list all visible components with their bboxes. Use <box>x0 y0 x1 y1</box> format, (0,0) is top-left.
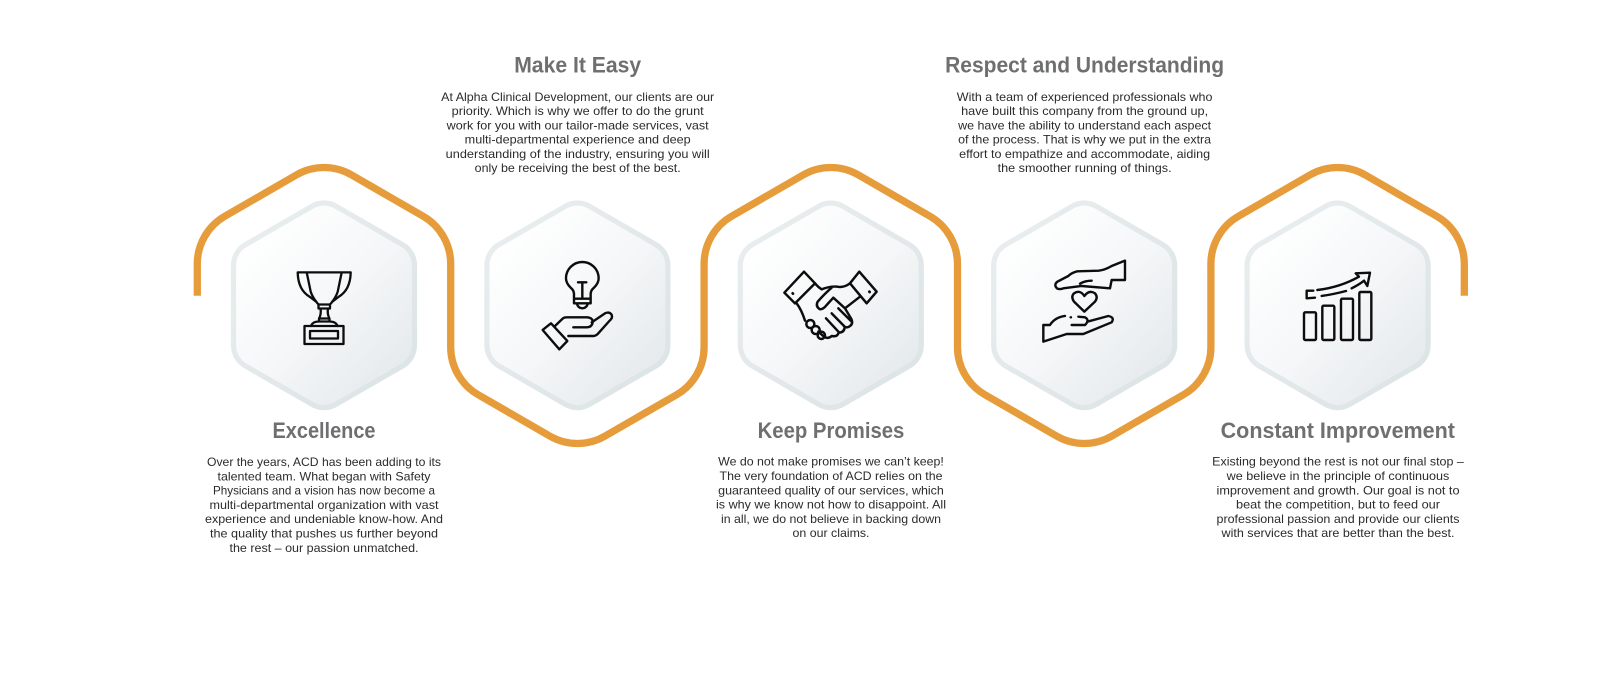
text: Constant Improvement body: improvement and growth. Our goal is not to <box>1216 483 1460 497</box>
icon: hands protecting a heart <box>1043 261 1125 342</box>
text: Respect and Understanding body: With a team of experienced professionals who <box>957 90 1213 104</box>
text: Respect and Understanding body: of the process. That is why we put in the extra <box>958 133 1211 147</box>
text: Constant Improvement body: with services that are better than the best. <box>1220 526 1454 540</box>
heading: Keep Promises: Keep Promises <box>758 418 904 443</box>
panel: Respect and Understanding <box>945 53 1224 408</box>
text: Excellence body: experience and undeniable know-how. And <box>205 512 443 526</box>
icon: light bulb over hand <box>543 262 612 349</box>
text: Constant Improvement body <box>1212 455 1464 540</box>
text: Make It Easy body: only be receiving the best of the best. <box>475 161 681 175</box>
icon: growth bar chart with arrow <box>1304 273 1371 340</box>
text: Excellence body <box>205 455 443 555</box>
hexagon: Keep Promises <box>740 203 921 408</box>
text: Excellence body: Physicians and a vision has now become a <box>213 484 435 498</box>
text: Respect and Understanding body <box>957 90 1213 175</box>
text: Keep Promises body: guaranteed quality of our services, which <box>718 483 944 497</box>
text: Respect and Understanding body: effort to empathize and accommodate, aiding <box>959 147 1210 161</box>
text: Respect and Understanding body: have built this company from the ground up, <box>961 104 1208 118</box>
heading: Make It Easy: Make It Easy <box>514 53 642 78</box>
text: Keep Promises body: We do not make promises we can’t keep! <box>718 455 944 469</box>
text: Respect and Understanding body: the smoother running of things. <box>998 161 1172 175</box>
panel: Keep Promises <box>716 203 946 540</box>
text: Make It Easy body <box>441 90 714 175</box>
text: Excellence body: talented team. What began with Safety <box>218 469 430 483</box>
text: Keep Promises body: on our claims. <box>792 526 870 540</box>
panel: Make It Easy <box>441 53 714 408</box>
text: Make It Easy body: understanding of the industry, ensuring you will <box>446 147 710 161</box>
text: Excellence body: the quality that pushes us further beyond <box>210 526 438 540</box>
text: Make It Easy body: work for you with our tailor-made services, vast <box>446 118 709 132</box>
text: Respect and Understanding body: we have the ability to understand each aspect <box>957 118 1212 132</box>
text: Excellence body: the rest – our passion unmatched. <box>230 541 418 555</box>
heading: Constant Improvement: Constant Improvement <box>1221 418 1456 443</box>
hexagon: Constant Improvement <box>1247 203 1428 408</box>
heading: Respect and Understanding: Respect and Understanding <box>945 53 1224 78</box>
icon: trophy <box>298 272 351 344</box>
text: Constant Improvement body: beat the competition, but to feed our <box>1236 498 1440 512</box>
panel: Constant Improvement <box>1212 203 1464 540</box>
hexagon: Respect and Understanding <box>994 203 1175 408</box>
text: Make It Easy body: multi-departmental experience and deep <box>465 133 691 147</box>
heading: Excellence: Excellence <box>272 418 376 443</box>
panel: Excellence <box>205 203 443 555</box>
hexagon: Make It Easy <box>487 203 668 408</box>
text: Make It Easy body: At Alpha Clinical Development, our clients are our <box>441 90 714 104</box>
text: Excellence body: multi-departmental organization with vast <box>210 498 439 512</box>
icon: handshake <box>784 272 877 339</box>
orange ribbon connecting the hexagons <box>197 168 1464 443</box>
text: Constant Improvement body: we believe in the principle of continuous <box>1226 469 1449 483</box>
text: Constant Improvement body: professional passion and provide our clients <box>1216 512 1460 526</box>
text: Keep Promises body: in all, we do not believe in backing down <box>721 512 941 526</box>
text: Constant Improvement body: Existing beyond the rest is not our final stop – <box>1212 455 1464 469</box>
text: Make It Easy body: priority. Which is why we offer to do the grunt <box>452 104 704 118</box>
text: Keep Promises body <box>716 455 946 540</box>
hexagon: Excellence <box>234 203 414 408</box>
text: Keep Promises body: The very foundation of ACD relies on the <box>720 469 943 483</box>
text: Excellence body: Over the years, ACD has been adding to its <box>207 455 441 469</box>
text: Keep Promises body: is why we know not how to disappoint. All <box>716 498 946 512</box>
